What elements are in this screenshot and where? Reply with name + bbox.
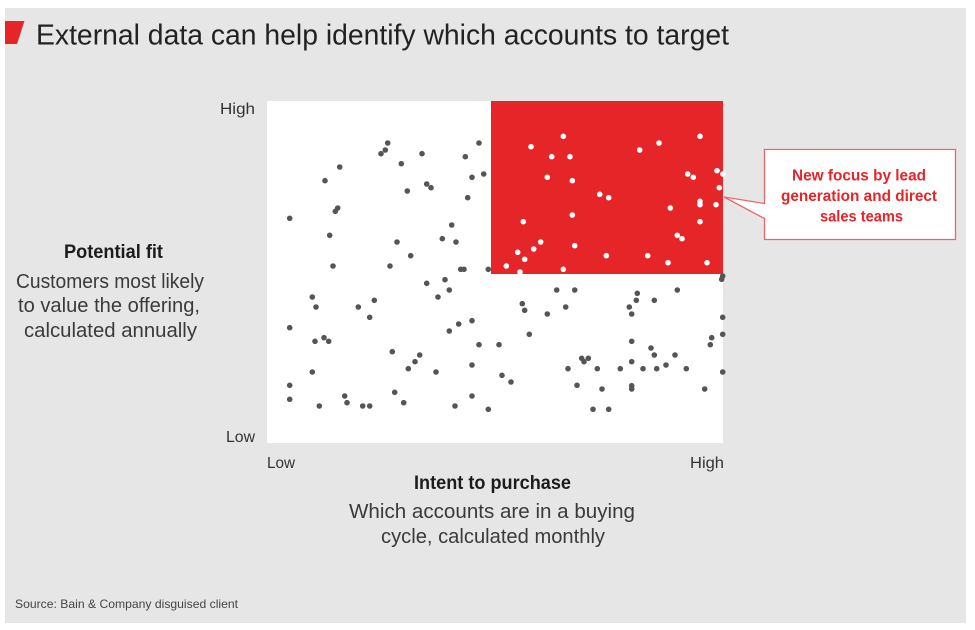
dark data points xyxy=(287,140,726,412)
y-axis text block: calculated annually xyxy=(24,320,197,342)
icon: red title marker xyxy=(5,21,24,44)
callout text: sales teams xyxy=(820,208,903,226)
scatter chart xyxy=(267,101,726,443)
y-axis text block: to value the offering, xyxy=(18,295,200,317)
x-axis label: high: High xyxy=(690,455,724,472)
x-axis text block: Which accounts are in a buying xyxy=(349,501,635,523)
source note: Source: Bain & Company disguised client xyxy=(15,597,239,611)
callout box with pointer xyxy=(724,150,956,240)
y-axis heading: Potential fit xyxy=(64,242,164,263)
title: External data can help identify which accounts to target xyxy=(36,20,729,52)
callout text: generation and direct xyxy=(781,188,937,205)
x-axis description: intent to purchase xyxy=(349,473,635,548)
x-axis text block: cycle, calculated monthly xyxy=(381,526,605,548)
white data points in highlighted quadrant xyxy=(504,134,726,275)
x-axis heading: Intent to purchase xyxy=(414,473,571,494)
plot area xyxy=(267,101,723,443)
x-axis text block xyxy=(349,501,635,548)
y-axis label: high: High xyxy=(220,101,255,118)
highlighted high-fit, high-intent quadrant xyxy=(491,101,723,274)
y-axis text block: Customers most likely xyxy=(16,271,204,293)
y-axis text block xyxy=(16,271,204,342)
callout xyxy=(724,150,956,240)
y-axis label: low: Low xyxy=(226,429,255,446)
y-axis description: potential fit xyxy=(16,242,204,342)
callout text xyxy=(781,168,937,226)
callout text: New focus by lead xyxy=(792,168,926,184)
x-axis label: low: Low xyxy=(267,455,295,472)
